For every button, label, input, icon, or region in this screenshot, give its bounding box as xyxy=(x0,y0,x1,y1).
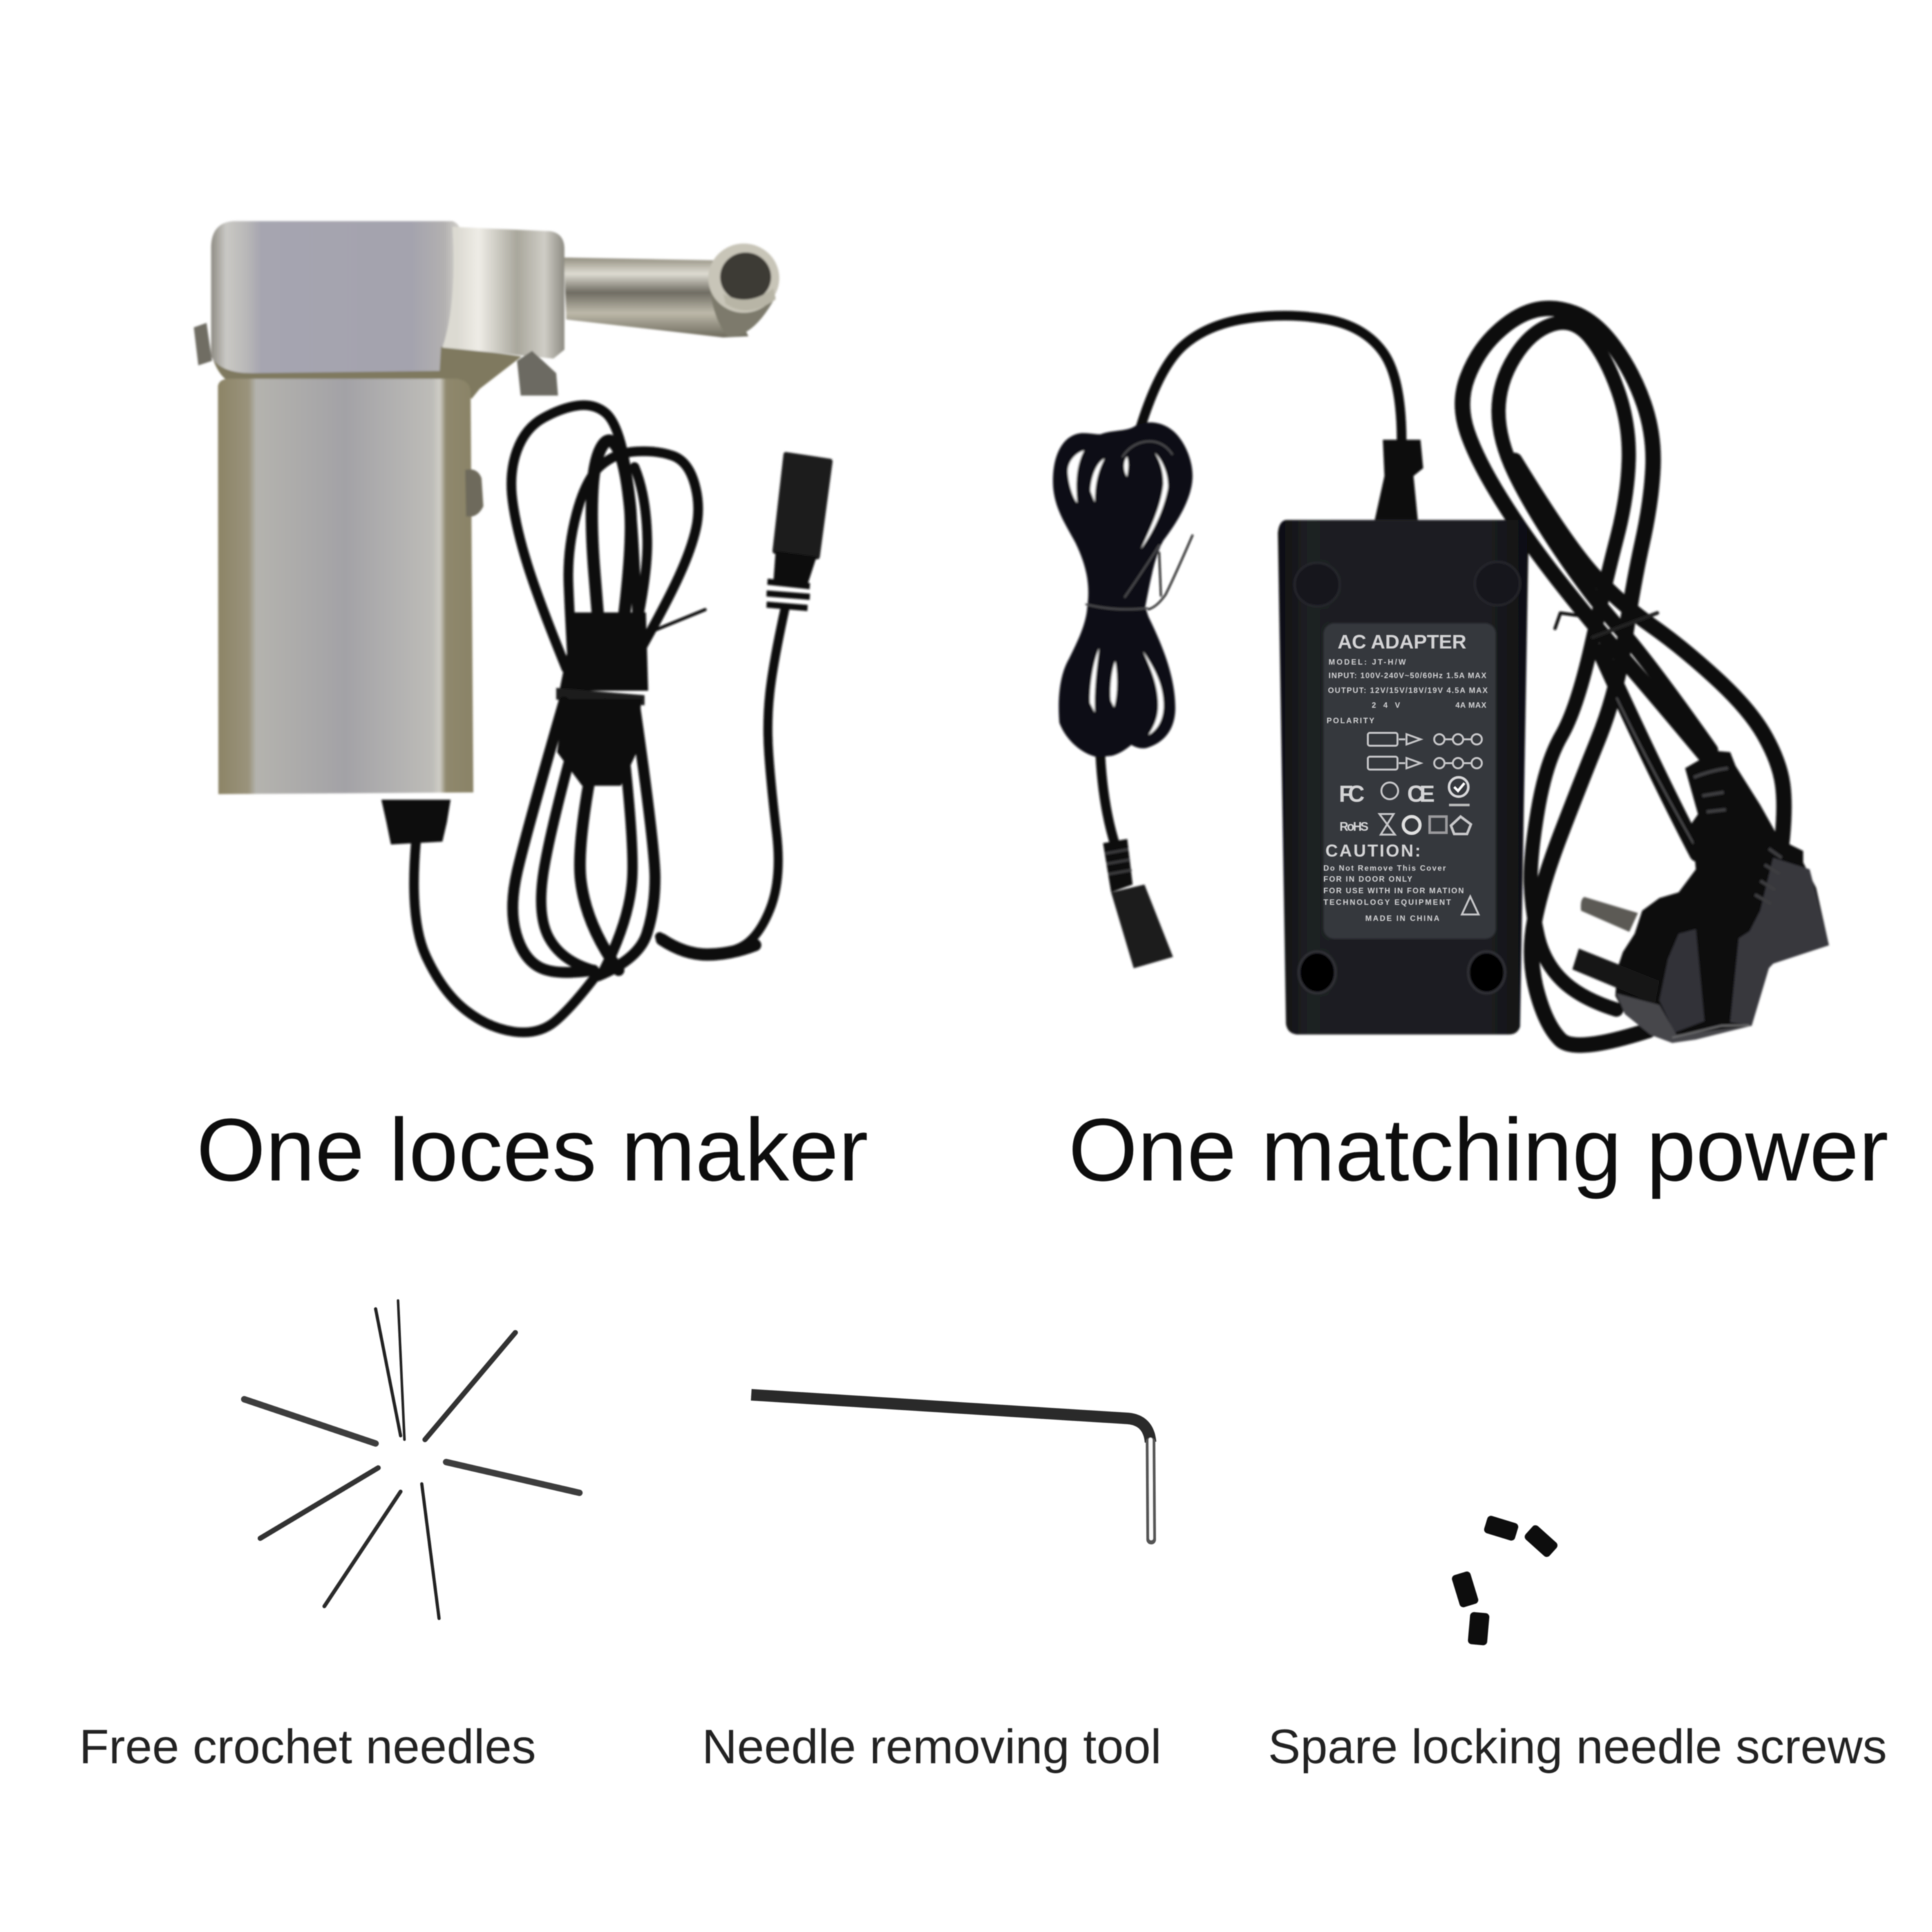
plug body xyxy=(1615,751,1829,1043)
certification marks row one xyxy=(1339,777,1470,807)
spec lines: 4A MAX xyxy=(1455,701,1486,710)
caption: needle removing tool: Needle removing tool xyxy=(702,1719,1161,1774)
DC plug xyxy=(1103,839,1173,969)
DC output cable xyxy=(1141,316,1401,442)
top metal block xyxy=(211,221,462,373)
plug facets xyxy=(1573,768,1829,1043)
cable strain relief xyxy=(1375,440,1423,520)
spec lines: POLARITY xyxy=(1327,716,1374,725)
plug pins xyxy=(1573,897,1660,1004)
tube nozzle xyxy=(564,243,779,337)
output cable xyxy=(659,610,785,954)
icon: spare locking screws xyxy=(1451,1515,1559,1645)
right side bolt xyxy=(465,469,484,516)
adapter label text xyxy=(1323,630,1488,923)
lower motor housing xyxy=(218,379,473,794)
caution lines: FOR IN DOOR ONLY xyxy=(1323,875,1412,884)
caution lines: TECHNOLOGY EQUIPMENT xyxy=(1323,898,1452,907)
adapter feet xyxy=(1294,562,1520,993)
adapter label plate xyxy=(1323,623,1496,939)
heading: one matching power: One matching power xyxy=(1068,1101,1888,1200)
DC output cable lower section xyxy=(1101,755,1115,846)
caution lines xyxy=(1323,864,1464,923)
cable gland xyxy=(381,800,451,844)
UK mains plug xyxy=(1573,751,1829,1043)
base flange xyxy=(211,344,522,399)
certification marks row two xyxy=(1340,814,1471,835)
caption: free crochet needles: Free crochet needles xyxy=(79,1719,536,1774)
DC connector xyxy=(766,455,830,608)
certification marks row one: CE xyxy=(1407,781,1435,807)
caution lines: MADE IN CHINA xyxy=(1365,914,1439,923)
icon: needle removing hex key xyxy=(751,1395,1151,1540)
caution lines: Do Not Remove This Cover xyxy=(1323,864,1446,873)
clamp screw xyxy=(517,351,558,395)
AC power cord xyxy=(1463,308,1784,1045)
panel: loces maker machine with cable xyxy=(194,221,830,1032)
adapter body xyxy=(1278,520,1529,1034)
polarity icons xyxy=(1368,733,1482,770)
spec lines: OUTPUT: 12V/15V/18V/19V 4.5A MAX xyxy=(1328,686,1488,695)
icon: free crochet needles xyxy=(244,1300,580,1618)
caution heading: CAUTION: xyxy=(1325,841,1421,860)
warning triangle xyxy=(1462,896,1479,914)
spec lines: MODEL: JT-H/W xyxy=(1329,658,1406,667)
spec lines: INPUT: 100V-240V~50/60Hz 1.5A MAX xyxy=(1329,671,1486,680)
heading: one loces maker: One loces maker xyxy=(196,1101,868,1200)
certification marks row two: RoHS xyxy=(1340,820,1368,834)
panel: matching power adapter with cables xyxy=(1053,308,1829,1045)
coiled cable bundle xyxy=(414,405,705,1032)
icon: left side bolt xyxy=(194,323,212,365)
caution lines: FOR USE WITH IN FOR MATION xyxy=(1323,886,1464,895)
spec lines xyxy=(1327,658,1488,725)
coiled DC cable xyxy=(1053,422,1193,757)
certification marks row one: FC xyxy=(1339,781,1365,807)
clamp arm xyxy=(442,227,564,359)
spec lines: 24V xyxy=(1372,701,1400,710)
caption: spare locking needle screws: Spare locking needle screws xyxy=(1268,1719,1887,1774)
label heading: AC ADAPTER xyxy=(1338,630,1466,653)
